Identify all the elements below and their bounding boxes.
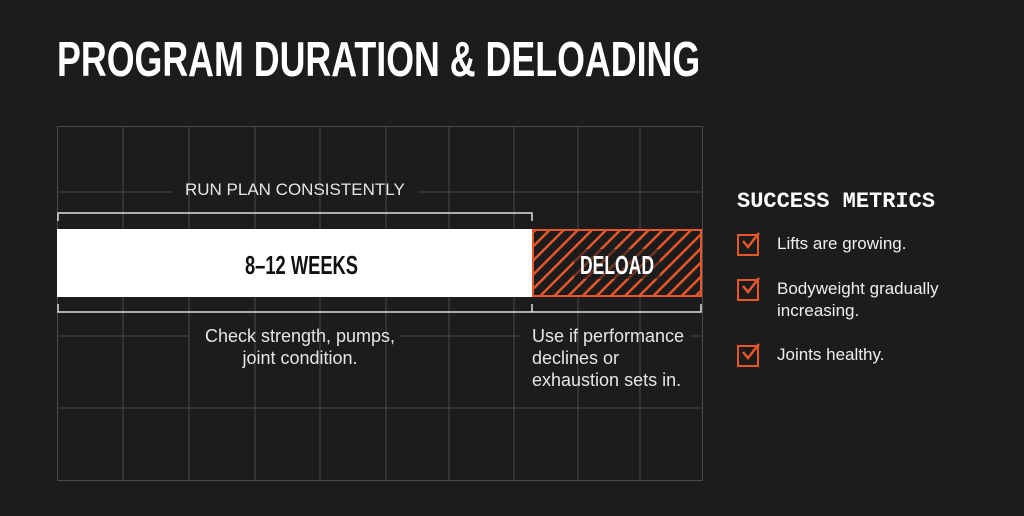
note: check strength: joint condition. <box>242 348 358 368</box>
title: PROGRAM DURATION & DELOADING <box>57 33 700 87</box>
bar: deload <box>533 230 701 296</box>
note: deload usage: Use if performance <box>532 326 684 346</box>
bar: 8-12 weeks: 8–12 WEEKS <box>245 250 358 280</box>
metric 1 <box>737 232 906 256</box>
metric 2: increasing. <box>777 301 859 320</box>
metric 1: Lifts are growing. <box>777 234 906 253</box>
note: deload usage <box>532 326 684 390</box>
metric 2 <box>737 277 939 320</box>
success metrics heading: SUCCESS METRICS <box>737 189 935 214</box>
note: deload usage: declines or <box>532 348 619 368</box>
metric 2: Bodyweight gradually <box>777 279 939 298</box>
brackets <box>58 213 701 312</box>
metric 3 <box>737 343 884 367</box>
note: check strength <box>205 326 395 368</box>
label: run plan consistently: RUN PLAN CONSISTENTLY <box>185 180 405 199</box>
note: deload usage: exhaustion sets in. <box>532 370 681 390</box>
bar: 8-12 weeks <box>57 229 532 297</box>
note: check strength: Check strength, pumps, <box>205 326 395 346</box>
bar: deload: DELOAD <box>580 250 654 280</box>
metric 3: Joints healthy. <box>777 345 884 364</box>
